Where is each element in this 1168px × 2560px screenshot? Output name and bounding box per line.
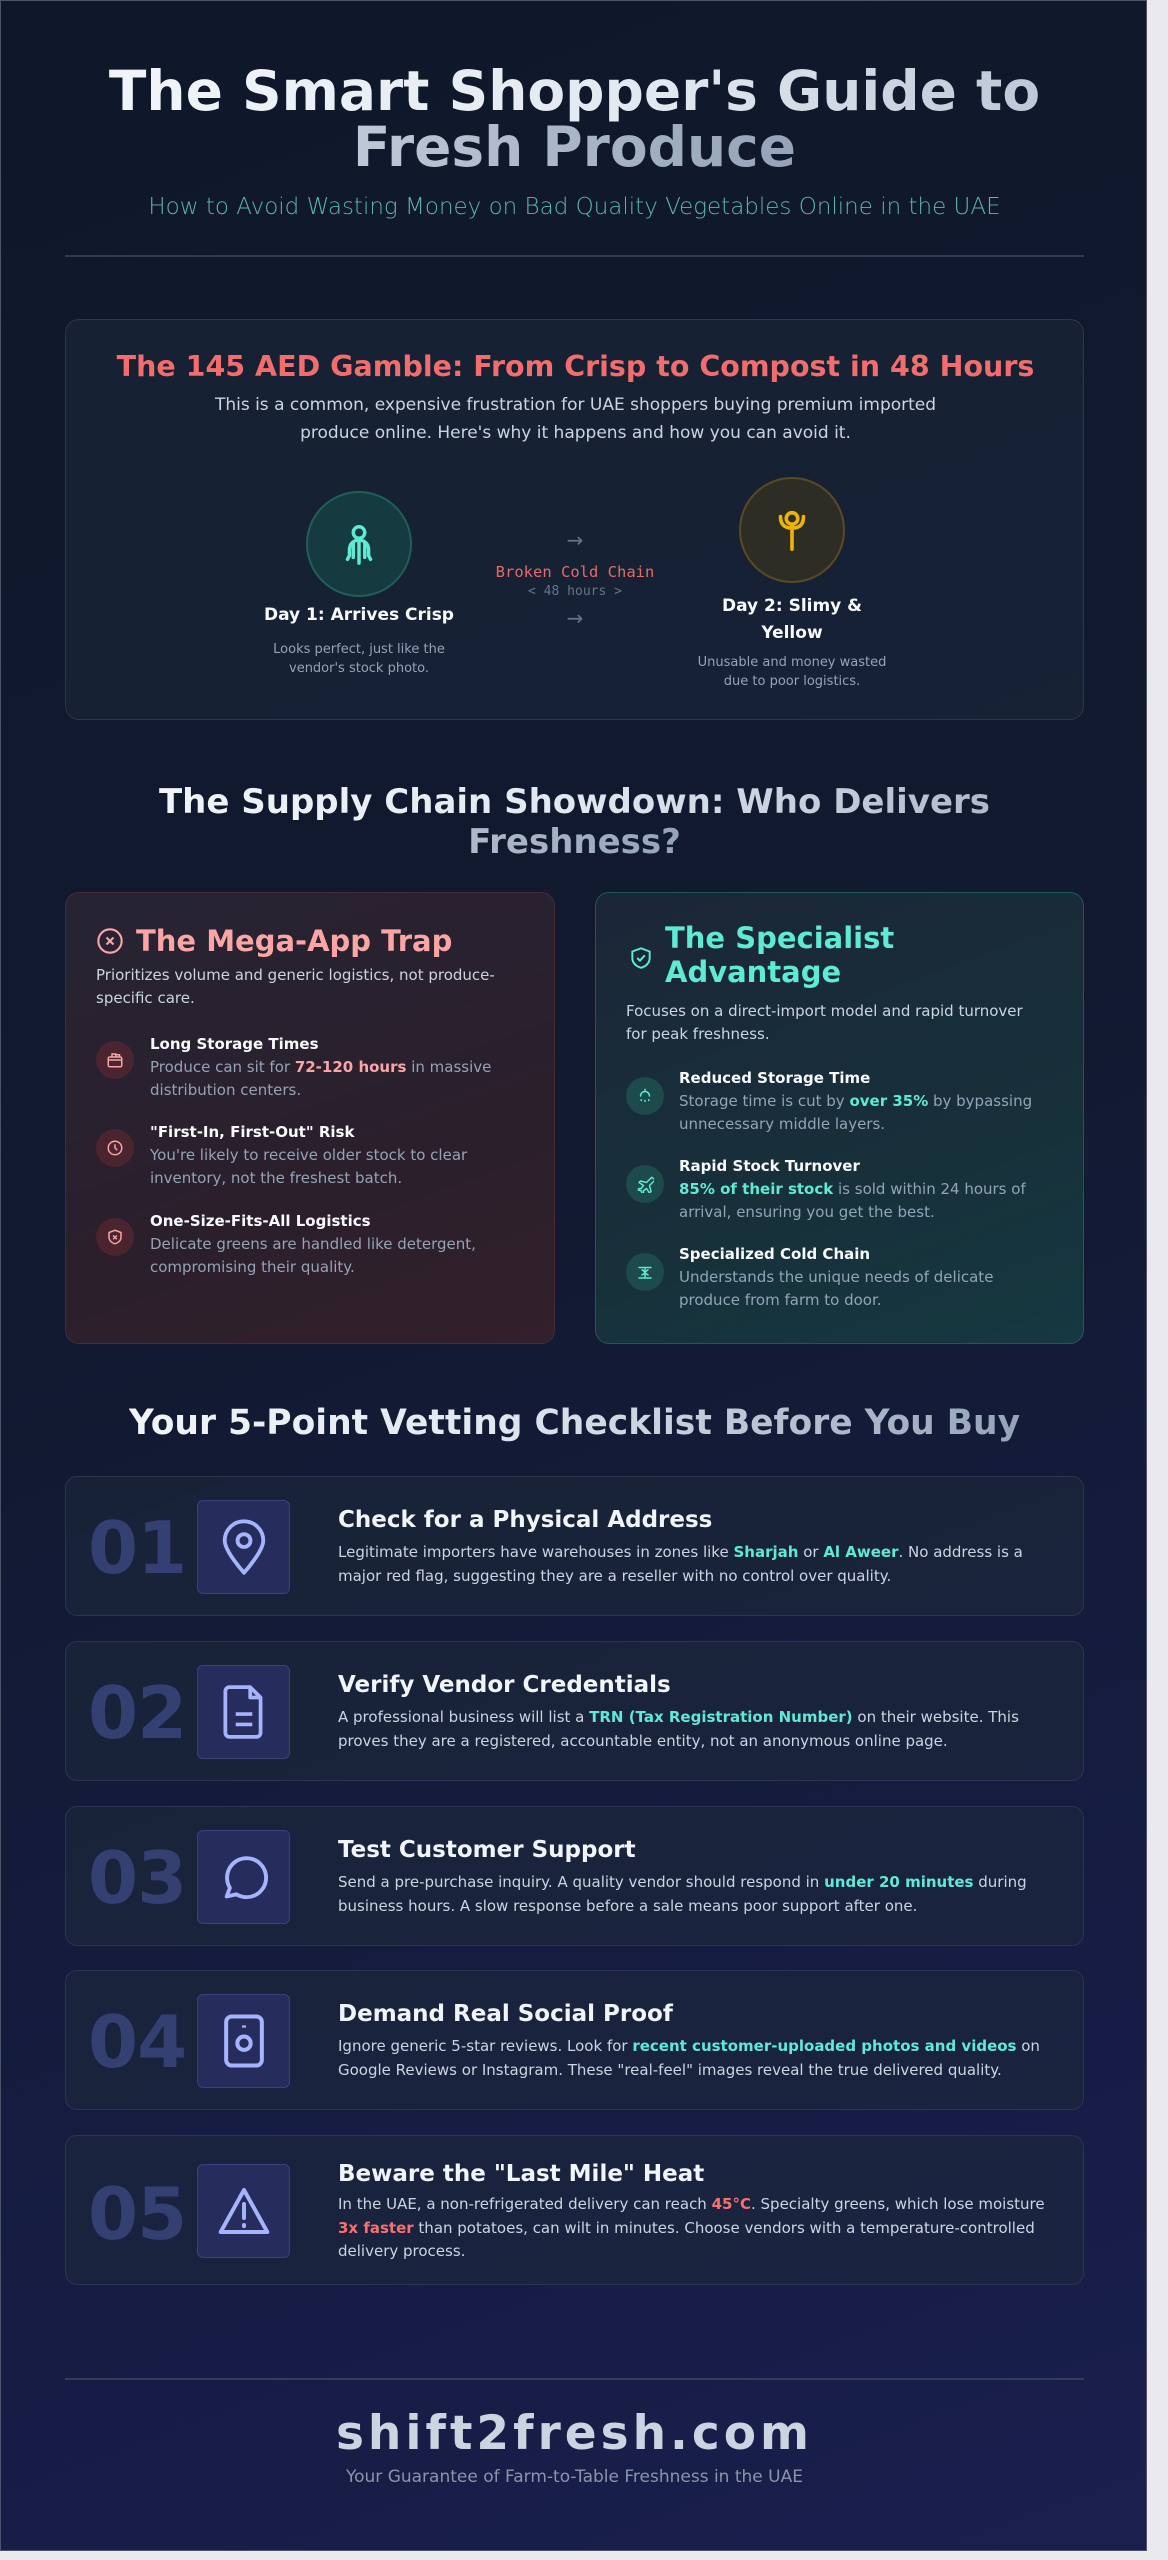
checklist item 04: Ignore generic 5-star reviews. Look for recent customer-uploaded photos and videos on Google Reviews or Instagram. These "real-feel" images reveal the true delivered quality. [338, 2037, 1040, 2078]
checklist item 03: Test Customer Support [338, 1837, 636, 1863]
panel: specialist advantage [595, 892, 1084, 1344]
checklist item 05 [65, 2135, 1084, 2285]
day 2 title: Day 2: Slimy & [722, 596, 862, 616]
subtitle: How to Avoid Wasting Money on Bad Quality Vegetables Online in the UAE [148, 194, 1001, 220]
checklist item 03: 03 [88, 1836, 186, 1920]
checklist item 01 [65, 1476, 1084, 1616]
checklist item 05: 05 [88, 2172, 186, 2256]
item: long storage [96, 1035, 491, 1099]
item: one-size logistics: One-Size-Fits-All Logistics [150, 1212, 371, 1230]
day 2 desc: Unusable and money wasted [698, 655, 886, 670]
arrow: broken cold chain: < 48 hours > [528, 584, 622, 599]
day 1 title: Day 1: Arrives Crisp [264, 605, 454, 625]
description: Prioritizes volume and generic logistics, not produce-specific care. [96, 966, 495, 1007]
day 2 [698, 477, 886, 689]
item: rapid turnover: Rapid Stock Turnover [679, 1157, 860, 1175]
section heading: supply chain [159, 782, 990, 862]
item: long storage: Long Storage Times [150, 1035, 319, 1053]
day 2 title: Yellow [761, 623, 823, 643]
checklist item 01: Check for a Physical Address [338, 1507, 712, 1533]
checklist item 02: Verify Vendor Credentials [338, 1672, 671, 1698]
item: cold chain [626, 1245, 993, 1309]
checklist item 05: Beware the "Last Mile" Heat [338, 2161, 704, 2187]
day 2 title [722, 596, 862, 643]
icon: location pin [197, 1500, 290, 1594]
checklist item 03 [65, 1806, 1084, 1946]
panel: mega-app trap [65, 892, 555, 1344]
title [109, 59, 1040, 179]
icon: wilted greens [739, 477, 845, 583]
item: FIFO risk [96, 1123, 468, 1187]
checklist item 04: 04 [88, 2000, 186, 2084]
item: reduced storage: Storage time is cut by over 35% by bypassing unnecessary middle layers. [679, 1092, 1032, 1133]
heading with x icon: The Mega-App Trap [136, 924, 452, 958]
checklist item 02 [65, 1641, 1084, 1781]
arrow: broken cold chain: → [567, 606, 583, 630]
item: one-size logistics [96, 1212, 476, 1276]
item: FIFO risk: "First-In, First-Out" Risk [150, 1123, 354, 1141]
checklist item 02: 02 [88, 1671, 186, 1755]
panel heading: The 145 AED Gamble: From Crisp to Compost in 48 Hours [117, 350, 1034, 383]
footer logo: shift2fresh.com [336, 2406, 813, 2461]
title: The Smart Shopper's Guide to [109, 59, 1040, 123]
item: one-size logistics: Delicate greens are handled like detergent, compromising their quality. [150, 1235, 476, 1276]
description: Focuses on a direct-import model and rapid turnover for peak freshness. [626, 1002, 1023, 1043]
arrow: broken cold chain: → [567, 528, 583, 552]
intro text: produce online. Here's why it happens and how you can avoid it. [300, 423, 851, 443]
checklist item 02: A professional business will list a TRN (Tax Registration Number) on their website. This proves they are a registered, accountable entity, not an anonymous online page. [338, 1708, 1019, 1750]
icon: camera/phone [197, 1994, 290, 2088]
icon: warning [197, 2164, 290, 2258]
item: long storage: Produce can sit for 72-120 hours in massive distribution centers. [150, 1058, 491, 1099]
day 2 desc [698, 655, 886, 689]
heading with shield icon: The Specialist [665, 921, 894, 955]
arrow: broken cold chain [496, 528, 654, 630]
item: cold chain: Specialized Cold Chain [679, 1245, 870, 1263]
section heading: supply chain: The Supply Chain Showdown: Who Delivers [159, 782, 990, 822]
heading with shield icon: Advantage [665, 955, 841, 989]
panel: 145 AED gamble [65, 319, 1084, 720]
checklist item 03: Send a pre-purchase inquiry. A quality vendor should respond in under 20 minutes during business hours. A slow response before a sale means poor support after one. [338, 1873, 1027, 1914]
checklist item 01: Legitimate importers have warehouses in zones like Sharjah or Al Aweer. No address is a major red flag, suggesting they are a reseller with no control over quality. [338, 1543, 1023, 1584]
item: reduced storage: Reduced Storage Time [679, 1069, 870, 1087]
footer tagline: Your Guarantee of Farm-to-Table Freshness in the UAE [346, 2467, 803, 2487]
day 1 desc: Looks perfect, just like the [273, 642, 445, 657]
section heading: checklist: Your 5-Point Vetting Checklist Before You Buy [129, 1403, 1020, 1443]
heading with shield icon [631, 921, 894, 989]
intro text [214, 395, 936, 443]
icon: document [197, 1665, 290, 1759]
item: rapid turnover: 85% of their stock is sold within 24 hours of arrival, ensuring you get the best. [679, 1180, 1026, 1221]
day 2 desc: due to poor logistics. [724, 674, 860, 689]
day 1 [264, 491, 454, 676]
title: Fresh Produce [353, 115, 796, 179]
arrow: broken cold chain: Broken Cold Chain [496, 563, 654, 581]
checklist item 05: In the UAE, a non-refrigerated delivery can reach 45°C. Specialty greens, which lose moisture 3x faster than potatoes, can wilt in minutes. Choose vendors with a temperature-controlled delivery process. [338, 2195, 1045, 2260]
item: FIFO risk: You're likely to receive older stock to clear inventory, not the freshest batch. [150, 1146, 467, 1187]
checklist item 01: 01 [88, 1506, 186, 1590]
item: rapid turnover [626, 1157, 1026, 1221]
item: reduced storage [626, 1069, 1032, 1133]
icon: crisp greens [306, 491, 412, 597]
day 1 desc: vendor's stock photo. [289, 661, 429, 676]
checklist item 04: Demand Real Social Proof [338, 2001, 673, 2027]
icon: chat bubble [197, 1830, 290, 1924]
item: cold chain: Understands the unique needs of delicate produce from farm to door. [679, 1268, 993, 1309]
section heading: supply chain: Freshness? [468, 822, 681, 862]
intro text: This is a common, expensive frustration for UAE shoppers buying premium imported [215, 395, 936, 415]
checklist item 04 [65, 1970, 1084, 2110]
day 1 desc [273, 642, 445, 676]
